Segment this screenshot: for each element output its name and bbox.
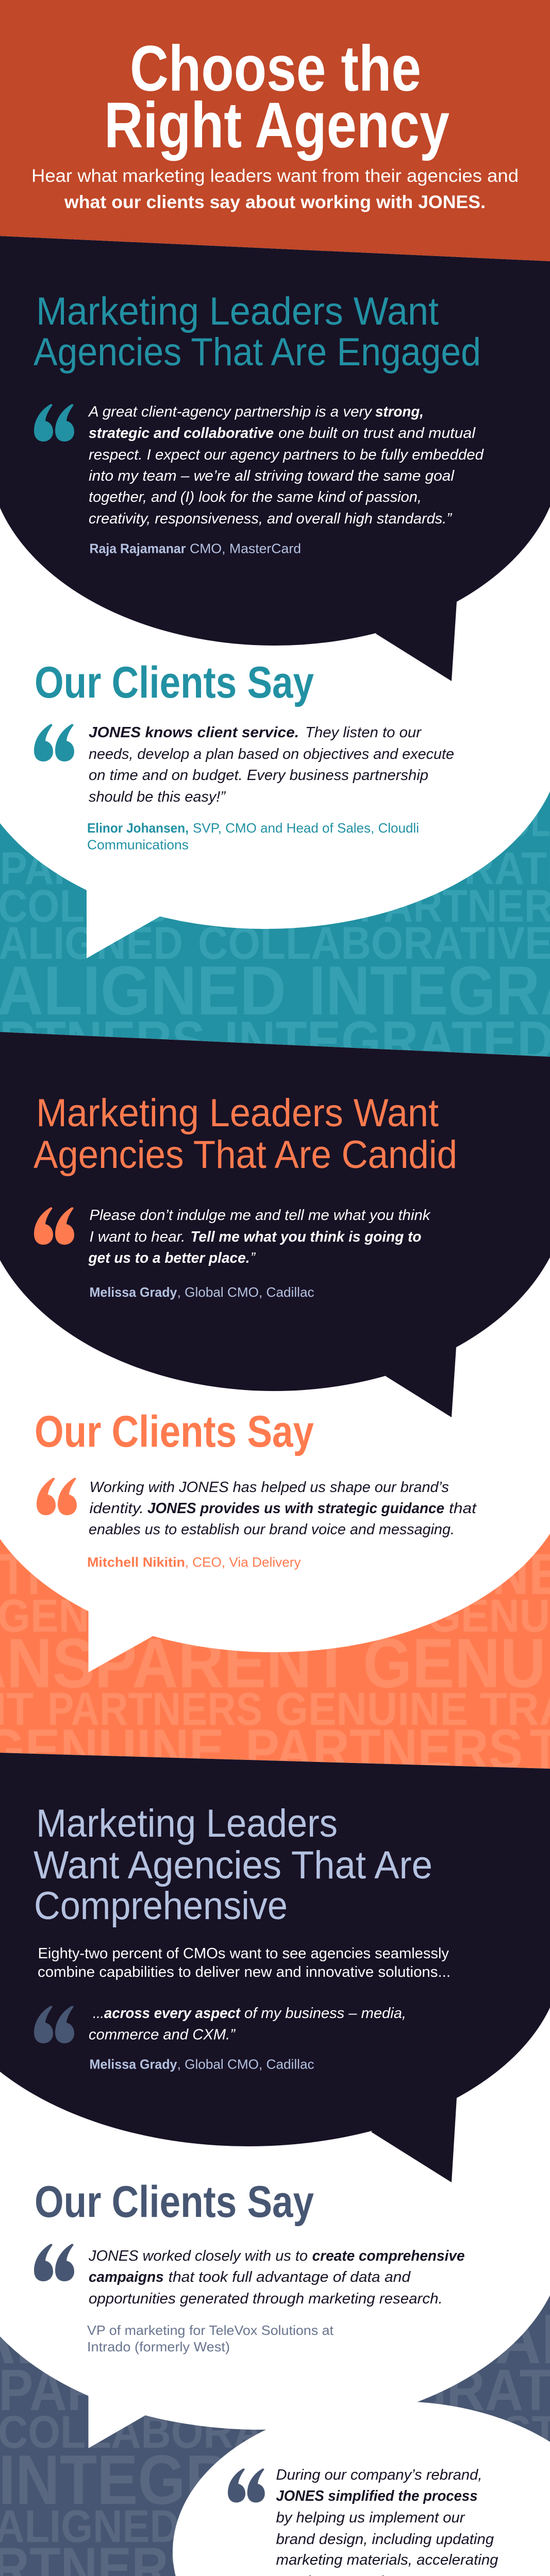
text block: CMO statistic: combine capabilities to deliver new and innovative solutions... [38, 1964, 451, 1980]
title: Choose the [130, 33, 421, 105]
heading: leaders want candid agencies: Agencies That Are Candid [34, 1133, 457, 1177]
quote: Mitchell Nikitin brand identity: JONES provides us with strategic guidance [147, 1500, 444, 1517]
subtitle: Hear what marketing leaders want from their agencies and [31, 166, 519, 186]
panel: coral word pattern background: PARTNERS [47, 1684, 262, 1735]
attribution: Elinor Johansen [87, 820, 419, 852]
quote: Melissa Grady candid: get us to a better place. [88, 1250, 249, 1266]
quote: Raja Rajamanar: strategic and collaborative [89, 425, 274, 442]
attribution: Elinor Johansen: Communications [87, 837, 189, 852]
quote: Mitchell Nikitin brand identity: identity. [90, 1500, 144, 1517]
quote: Elinor Johansen: They listen to our [305, 724, 422, 741]
attribution: TeleVox VP: VP of marketing for TeleVox Solutions at [87, 2323, 334, 2338]
quote: Melissa Grady candid: ” [251, 1250, 256, 1266]
quote: Melissa Grady candid: Please don’t indulge me and tell me what you think [90, 1207, 431, 1224]
panel: white bubble, Alan Tam [173, 2401, 550, 2576]
text block: CMO statistic [38, 1945, 451, 1980]
attribution: Melissa Grady comprehensive [90, 2057, 314, 2072]
quote: TeleVox VP [88, 2248, 465, 2307]
quote: Raja Rajamanar: A great client-agency partnership is a very [88, 404, 373, 420]
quote: Alan Tam: by helping us implement our [276, 2510, 465, 2526]
quote: Melissa Grady comprehensive [89, 2005, 406, 2043]
quote: TeleVox VP: campaigns [89, 2269, 164, 2285]
heading: leaders want engaged agencies: Agencies That Are Engaged [34, 330, 481, 374]
heading: our clients say, coral: Our Clients Say [35, 1407, 314, 1456]
quote: Alan Tam: brand design, including updating [276, 2531, 494, 2548]
icon: quote mark coral client [37, 1478, 77, 1515]
panel: navy word pattern background [0, 2267, 550, 2576]
attribution: Elinor Johansen: Elinor Johansen, [87, 820, 189, 836]
quote: Raja Rajamanar: strong, [375, 404, 424, 420]
quote: Mitchell Nikitin brand identity: that [449, 1500, 477, 1517]
heading: leaders want engaged agencies: Marketing Leaders Want [36, 290, 439, 333]
heading: leaders want comprehensive agencies: Marketing Leaders [36, 1802, 338, 1845]
subtitle: what our clients say about working with JONES. [64, 192, 486, 212]
panel: white clients bubble, comprehensive [0, 2043, 550, 2448]
heading: leaders want engaged agencies [34, 290, 481, 374]
attribution: Melissa Grady candid: , Global CMO, Cadillac [177, 1284, 314, 1300]
quote: Alan Tam: JONES simplified the process [276, 2488, 477, 2504]
quote: TeleVox VP: JONES worked closely with us to [88, 2248, 308, 2264]
heading: our clients say, navy: Our Clients Say [35, 2177, 314, 2227]
attribution: Melissa Grady comprehensive: Melissa Grady [90, 2057, 177, 2072]
quote: TeleVox VP: that took full advantage of data and [169, 2269, 411, 2285]
panel: navy word pattern background: COLLABORATIVE [0, 2406, 353, 2458]
attribution: TeleVox VP: Intrado (formerly West) [87, 2339, 230, 2354]
icon: quote mark navy client [34, 2244, 74, 2281]
panel: coral word pattern background: GENUINE [275, 1684, 468, 1735]
quote: Melissa Grady comprehensive: of my business – media, [244, 2005, 406, 2022]
attribution: Raja Rajamanar [90, 541, 301, 556]
quote: Mitchell Nikitin brand identity [89, 1479, 477, 1538]
quote: TeleVox VP: create comprehensive [312, 2248, 465, 2264]
attribution: Elinor Johansen: SVP, CMO and Head of Sales, Cloudli [193, 820, 419, 836]
panel: navy word pattern background: INTEGRATED [0, 2441, 392, 2519]
attribution: Raja Rajamanar: Raja Rajamanar [90, 541, 186, 556]
panel: teal word pattern background: PARTNERS [0, 842, 222, 894]
panel: teal word pattern background: ALIGNED [0, 952, 286, 1029]
quote: Alan Tam: During our company’s rebrand, [276, 2467, 482, 2483]
text block: CMO statistic: Eighty-two percent of CMOs want to see agencies seamlessly [38, 1945, 449, 1962]
quote: Mitchell Nikitin brand identity: Working with JONES has helped us shape our brand’s [90, 1479, 449, 1496]
icon: quote mark teal client [34, 724, 74, 761]
title [104, 33, 449, 161]
panel: dark bubble, comprehensive [0, 1753, 550, 2182]
quote: Raja Rajamanar: one built on trust and mutual [278, 425, 476, 442]
panel: coral word pattern background [0, 1534, 550, 1769]
panel: navy word pattern background: PARTNERS [0, 2358, 281, 2422]
attribution: Melissa Grady candid [90, 1284, 314, 1300]
attribution: TeleVox VP [87, 2323, 334, 2354]
quote: Elinor Johansen: needs, develop a plan based on objectives and execute [89, 746, 454, 762]
panel: teal word pattern background: ALIGNED [0, 917, 183, 969]
attribution: Mitchell Nikitin coral [87, 1554, 301, 1570]
panel: dark bubble, candid [0, 1032, 550, 1417]
attribution: Mitchell Nikitin coral: Mitchell Nikitin [87, 1554, 185, 1570]
quote: Raja Rajamanar: creativity, responsiveness, and overall high standards.” [89, 511, 452, 527]
panel: coral word pattern background: TI [0, 1542, 40, 1606]
quote: Alan Tam [276, 2467, 498, 2576]
quote: Melissa Grady comprehensive: ... [93, 2005, 104, 2022]
attribution: Melissa Grady candid: Melissa Grady [90, 1284, 177, 1300]
heading: leaders want comprehensive agencies [34, 1802, 432, 1928]
panel: teal word pattern background [0, 791, 550, 1057]
quote: Melissa Grady candid: Tell me what you think is going to [191, 1229, 422, 1245]
heading: our clients say, teal: Our Clients Say [35, 658, 314, 707]
heading: leaders want candid agencies [34, 1091, 457, 1177]
quote: Melissa Grady comprehensive: commerce and CXM.” [89, 2027, 236, 2043]
quote: Elinor Johansen: JONES knows client service. [89, 724, 299, 741]
panel: white clients bubble, candid [0, 1266, 550, 1672]
quote: Raja Rajamanar: into my team – we’re all striving toward the same goal [89, 468, 455, 484]
attribution: Raja Rajamanar: CMO, MasterCard [190, 541, 301, 556]
quote: Mitchell Nikitin brand identity: enables us to establish our brand voice and messaging. [89, 1521, 455, 1538]
quote: Raja Rajamanar: together, and (I) look for the same kind of passion, [89, 489, 422, 505]
attribution: Melissa Grady comprehensive: , Global CMO, Cadillac [177, 2057, 314, 2072]
panel: header band [0, 0, 550, 261]
quote: Raja Rajamanar: respect. I expect our agency partners to be fully embedded [89, 447, 484, 463]
panel: dark bubble, engaged [0, 236, 550, 681]
heading: leaders want candid agencies: Marketing Leaders Want [36, 1091, 439, 1135]
panel: coral word pattern background: PARTNERS [245, 1718, 523, 1782]
panel: navy word pattern background: ALIGNED [0, 2500, 179, 2552]
quote: Melissa Grady candid: I want to hear. [90, 1229, 186, 1245]
quote: TeleVox VP: opportunities generated through marketing research. [89, 2291, 443, 2307]
quote: Elinor Johansen: on time and on budget. Every business partnership [89, 767, 428, 784]
quote: Raja Rajamanar [88, 404, 484, 527]
icon: quote mark navy [34, 2006, 74, 2043]
quote: Elinor Johansen [89, 724, 454, 805]
quote: Alan Tam: marketing materials, accelerating [276, 2552, 498, 2568]
panel: white clients bubble, engaged [0, 543, 550, 958]
panel: coral word pattern background: GENUINE [0, 1590, 190, 1642]
panel: teal word pattern background: COLLABORATIVE [0, 880, 348, 931]
heading: leaders want comprehensive agencies: Comprehensive [34, 1884, 288, 1928]
quote: Melissa Grady comprehensive: across every aspect [104, 2005, 241, 2022]
icon: quote mark teal [34, 404, 74, 442]
attribution: Mitchell Nikitin coral: , CEO, Via Delivery [185, 1554, 301, 1570]
icon: quote mark Alan Tam [228, 2468, 265, 2502]
heading: leaders want comprehensive agencies: Want Agencies That Are [34, 1843, 432, 1887]
title: Right Agency [104, 90, 449, 161]
icon: quote mark coral [34, 1207, 74, 1245]
subtitle [31, 166, 519, 212]
quote: Elinor Johansen: should be this easy!” [89, 789, 226, 805]
quote: Melissa Grady candid [88, 1207, 431, 1266]
